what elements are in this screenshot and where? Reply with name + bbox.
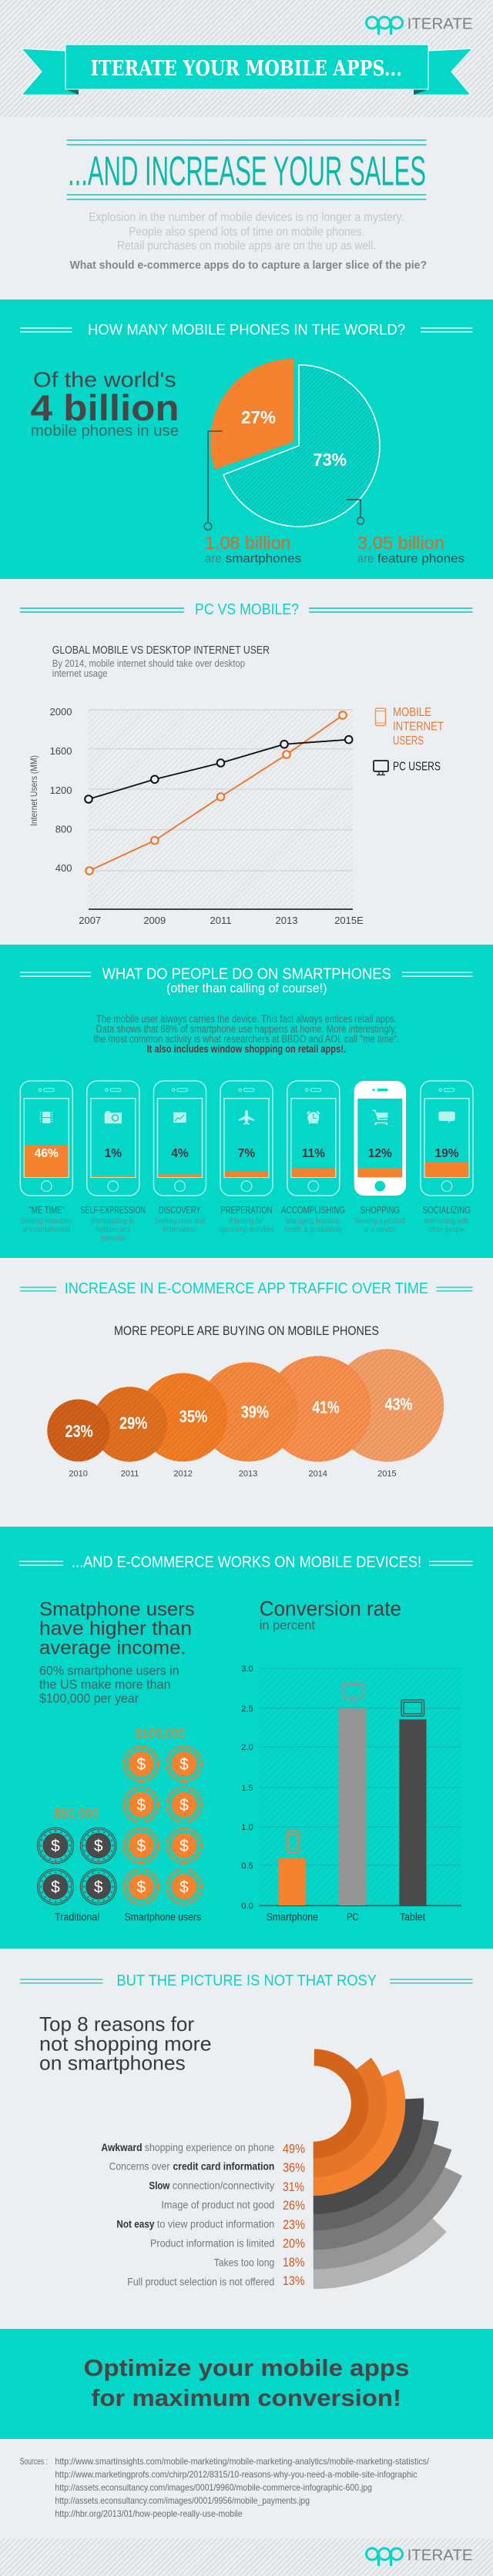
- intro text: Explosion in the number of mobile devices is no longer a mystery.: [89, 211, 404, 224]
- phone labels: SELF-EXPRESSION: [80, 1204, 146, 1216]
- text: top 8 reasons: on smartphones: [39, 2051, 186, 2074]
- icon: film: [40, 1112, 52, 1123]
- dollar signs: $: [136, 1878, 146, 1896]
- x axis labels: 2013: [276, 915, 297, 926]
- axis labels: 3.0: [241, 1664, 253, 1674]
- bar: pc: [339, 1708, 366, 1905]
- header hatched band: [0, 0, 493, 117]
- text: top 8 reasons: [39, 2012, 212, 2074]
- pictogram: income coins: $50,000: [54, 1806, 99, 1821]
- callout: feature phones: 3.05 billion: [357, 533, 444, 553]
- callout: smartphones: [205, 533, 301, 566]
- x axis labels: 2015E: [334, 915, 364, 926]
- radial chart: reasons: [276, 2048, 462, 2290]
- values: 23%: [65, 1422, 93, 1441]
- y axis labels: 1600: [50, 745, 72, 757]
- pie chart: [204, 359, 380, 530]
- axis labels: 2.0: [241, 1743, 253, 1752]
- percent values: 13%: [283, 2273, 305, 2288]
- years: 2011: [121, 1469, 139, 1478]
- icon: tablet: [401, 1700, 424, 1716]
- reason rows: Takes too long: [214, 2257, 274, 2269]
- subheading: buying on mobile: MORE PEOPLE ARE BUYING ON MOBILE PHONES: [114, 1323, 379, 1338]
- icon: speech bubble: [438, 1112, 455, 1123]
- text: 4 billion phones: [31, 368, 179, 440]
- phone: self-expression: [87, 1081, 139, 1196]
- icon: smartphone: [287, 1831, 299, 1852]
- reason rows: shopping experience on phone: [145, 2141, 274, 2153]
- phone: preperation: [220, 1081, 273, 1196]
- phone descriptions: Managing finances,: [286, 1216, 340, 1226]
- heading: pc vs mobile: PC VS MOBILE?: [195, 601, 299, 618]
- percent values: 26%: [283, 2198, 305, 2213]
- callout: feature phones: are: [357, 553, 374, 566]
- phone labels: SOCIALIZING: [423, 1204, 471, 1216]
- values: [65, 1395, 413, 1441]
- phone descriptions: health & productivity: [284, 1225, 343, 1234]
- pictogram: income coins: Smartphone users: [125, 1911, 201, 1923]
- dollar signs: $: [94, 1837, 103, 1855]
- sources: http://www.smartinsights.com/mobile-marketing/mobile-marketing-analytics/mobile-marketing-statistics/: [55, 2456, 430, 2467]
- panel: call to action: Optimize your mobile apps: [84, 2354, 409, 2381]
- phone: discovery: 4%: [171, 1147, 189, 1160]
- years: 2012: [173, 1469, 193, 1478]
- phone descriptions: Seeking a product: [354, 1216, 405, 1226]
- pictogram: income coins: $100,000: [136, 1726, 186, 1741]
- years: 2013: [239, 1469, 257, 1478]
- heading: e-commerce traffic: INCREASE IN E-COMMERCE APP TRAFFIC OVER TIME: [65, 1280, 428, 1297]
- legend: pc users: PC USERS: [393, 761, 441, 774]
- pie chart: 73%: [313, 450, 347, 470]
- phone: self-expression: 1%: [105, 1147, 122, 1160]
- dollar signs: $: [179, 1797, 189, 1814]
- heading: conversion rate: Conversion rate: [260, 1597, 401, 1620]
- callout: feature phones: [357, 533, 464, 566]
- panel: call to action: for maximum conversion!: [91, 2384, 401, 2411]
- y axis labels: [50, 706, 72, 874]
- icon: cart: [373, 1110, 388, 1125]
- sources: Sources :: [20, 2456, 48, 2467]
- logo: appiterate top: ITERATE: [407, 16, 473, 33]
- panel: e-commerce works on mobile: [0, 1527, 493, 1949]
- phone descriptions: or entertainment: [22, 1225, 70, 1234]
- dollar signs: $: [179, 1878, 189, 1896]
- text: 4 billion phones: 4 billion: [31, 387, 179, 428]
- legend: mobile internet users: MOBILE: [393, 706, 431, 719]
- intro text: [70, 211, 427, 272]
- dollar signs: $: [136, 1797, 146, 1814]
- reason rows: connection/connectivity: [173, 2180, 274, 2192]
- callout: feature phones: feature phones: [377, 553, 464, 566]
- text: income claim: 60% smartphone users in: [39, 1663, 179, 1678]
- years: 2015: [377, 1469, 397, 1478]
- percent values: 23%: [283, 2217, 305, 2232]
- phone descriptions: hobbies and: [96, 1225, 130, 1234]
- chart heading: By 2014, mobile internet should take over desktop: [52, 657, 245, 669]
- callout: smartphones: 1.08 billion: [205, 533, 291, 553]
- percent values: 36%: [283, 2160, 305, 2175]
- bar labels: Smartphone: [267, 1911, 318, 1923]
- pictogram: income coins: Traditional: [55, 1911, 99, 1923]
- years: [69, 1469, 397, 1478]
- reason rows: Awkward: [101, 2141, 142, 2153]
- x axis labels: 2011: [210, 915, 231, 926]
- icon: chart: [173, 1112, 186, 1122]
- years: 2014: [308, 1469, 327, 1478]
- x axis labels: [79, 915, 364, 926]
- sources: [20, 2456, 430, 2519]
- heading: conversion rate: [260, 1597, 401, 1633]
- logo: appiterate bottom: [367, 2548, 473, 2566]
- intro text: What should e-commerce apps do to capture a larger slice of the pie?: [70, 259, 427, 272]
- text: income claim: the US make more than: [39, 1677, 171, 1691]
- phone descriptions: Participating in: [92, 1216, 134, 1226]
- values: 29%: [119, 1413, 147, 1433]
- footer hatched band: [0, 2538, 493, 2576]
- y axis labels: 800: [55, 824, 72, 835]
- axis labels: 0.0: [241, 1902, 253, 1911]
- axis labels: [241, 1664, 253, 1911]
- percent values: 18%: [283, 2255, 305, 2270]
- heading: what do people do: (other than calling of course!): [166, 981, 327, 995]
- x axis labels: 2007: [79, 915, 101, 926]
- bubble chart: [47, 1349, 444, 1478]
- heading: not that rosy: BUT THE PICTURE IS NOT THAT ROSY: [116, 1972, 377, 1989]
- bar: tablet: [399, 1719, 427, 1905]
- reason rows: Slow: [149, 2180, 169, 2192]
- intro text: Retail purchases on mobile apps are on the up as well.: [117, 239, 376, 253]
- logo: appiterate top: [367, 16, 473, 35]
- phone descriptions: or a service: [364, 1225, 396, 1234]
- callout: smartphones: smartphones: [226, 553, 301, 566]
- phone descriptions: information: [163, 1225, 196, 1234]
- phone labels: DISCOVERY: [159, 1204, 201, 1216]
- percent values: 20%: [283, 2236, 305, 2251]
- dollar signs: $: [179, 1837, 189, 1855]
- callout: smartphones: are: [205, 553, 222, 566]
- x axis labels: 2009: [143, 915, 166, 926]
- title ribbon: [22, 45, 472, 95]
- values: 43%: [385, 1395, 413, 1414]
- years: 2010: [69, 1469, 88, 1478]
- chart heading: GLOBAL MOBILE VS DESKTOP INTERNET USER: [52, 644, 270, 657]
- values: 41%: [312, 1398, 340, 1417]
- reason rows: [101, 2141, 305, 2288]
- percent values: [283, 2142, 305, 2288]
- phone descriptions: Planning for: [230, 1216, 263, 1226]
- icon: plane: [239, 1110, 254, 1125]
- icon: monitor: [342, 1683, 364, 1703]
- dark coins: [38, 1828, 116, 1905]
- icon: alarm clock: [307, 1112, 320, 1124]
- phone: me time: [20, 1081, 72, 1196]
- text: explanation: The mobile user always carries the device. This fact always entices retail apps.: [96, 1013, 397, 1025]
- dollar signs: $: [179, 1755, 189, 1774]
- phone: socializing: 19%: [434, 1147, 459, 1160]
- dollar signs: $: [51, 1878, 60, 1896]
- y axis labels: 400: [55, 862, 72, 874]
- legend: mobile internet users: INTERNET: [393, 721, 444, 734]
- series: pc: [85, 736, 353, 803]
- phone descriptions: upcoming activities: [219, 1225, 274, 1234]
- sources: http://assets.econsultancy.com/images/0001/9960/mobile-commerce-infographic-600.jpg: [55, 2482, 372, 2493]
- reason rows: Image of product not good: [161, 2199, 274, 2211]
- panel: what people do on smartphones: [0, 945, 493, 1258]
- pictogram: income coins: [38, 1726, 202, 1923]
- series: mobile: [86, 711, 347, 875]
- pie chart: 27%: [241, 407, 276, 427]
- values: 39%: [241, 1403, 269, 1422]
- text: explanation: Data shows that 68% of smartphone use happens at home. More interestingly,: [96, 1023, 397, 1035]
- reason rows: credit card information: [173, 2160, 274, 2173]
- text: explanation: It also includes window shopping on retail apps!.: [147, 1043, 346, 1055]
- y axis labels: 2000: [50, 706, 72, 718]
- phone: discovery: [154, 1081, 206, 1196]
- phone labels: PREPERATION: [220, 1204, 273, 1216]
- title ribbon: ITERATE YOUR MOBILE APPS...: [91, 57, 402, 81]
- reason rows: Not easy: [116, 2218, 155, 2230]
- y axis labels: 1200: [50, 785, 72, 796]
- heading: how many phones: HOW MANY MOBILE PHONES IN THE WORLD?: [88, 323, 405, 339]
- text: income claim: have higher than: [39, 1618, 192, 1640]
- phone: socializing: [421, 1081, 473, 1196]
- text: income claim: $100,000 per year: [39, 1691, 139, 1705]
- dollar signs: [51, 1755, 189, 1896]
- reason rows: Product information is limited: [150, 2237, 274, 2250]
- axis labels: 1.5: [241, 1784, 253, 1793]
- phone descriptions: Seeking news and: [154, 1216, 205, 1226]
- heading: what do people do: [20, 966, 473, 995]
- heading: conversion rate: in percent: [260, 1618, 315, 1633]
- phone labels: SHOPPING: [361, 1204, 400, 1216]
- text: top 8 reasons: Top 8 reasons for: [39, 2012, 194, 2036]
- text: income claim: average income.: [39, 1638, 186, 1659]
- reason rows: to view product information: [157, 2218, 274, 2230]
- dollar signs: $: [136, 1755, 146, 1774]
- text: explanation: [94, 1013, 399, 1055]
- logo: appiterate bottom: ITERATE: [407, 2548, 473, 2564]
- phone: accomplishing: [287, 1081, 340, 1196]
- bar labels: PC: [347, 1911, 358, 1923]
- heading: what do people do: WHAT DO PEOPLE DO ON SMARTPHONES: [102, 966, 391, 983]
- panel: call to action: [0, 2329, 493, 2439]
- values: 35%: [179, 1407, 207, 1426]
- axis labels: 2.5: [241, 1705, 253, 1714]
- bar: smartphone: [279, 1858, 306, 1905]
- reason rows: Full product selection is not offered: [127, 2275, 274, 2287]
- orange coins: [123, 1746, 202, 1905]
- phone descriptions: Seeking relaxation: [20, 1216, 72, 1226]
- text: explanation: the most common activity is what researchers at BBDO and AOL call "me time".: [94, 1033, 399, 1045]
- phone: preperation: 7%: [238, 1147, 255, 1160]
- line chart: [29, 706, 364, 926]
- phone: shopping (highlighted): [354, 1081, 406, 1196]
- chart heading: [52, 644, 270, 679]
- axis labels: 0.5: [241, 1862, 253, 1871]
- phone: me time: 46%: [35, 1147, 59, 1160]
- phone labels: "ME TIME": [29, 1204, 65, 1216]
- text: 4 billion phones: mobile phones in use: [31, 423, 179, 440]
- sources: http://hbr.org/2013/01/how-people-really-use-mobile: [55, 2508, 243, 2519]
- bar labels: [267, 1911, 425, 1923]
- bar chart: conversion rate: [241, 1664, 461, 1923]
- legend: pc users: [374, 761, 441, 774]
- chart heading: internet usage: [52, 667, 108, 679]
- y axis title: Internet Users (MM): [29, 755, 39, 826]
- phone labels: [29, 1204, 471, 1216]
- phone descriptions: [20, 1216, 469, 1243]
- text: 4 billion phones: Of the world's: [33, 368, 176, 392]
- dollar signs: $: [51, 1837, 60, 1855]
- phone labels: ACCOMPLISHING: [281, 1204, 345, 1216]
- sources: http://www.marketingprofs.com/chirp/2012/8315/10-reasons-why-you-need-a-mobile-site-infographic: [55, 2469, 418, 2480]
- sources: http://assets.econsultancy.com/images/0001/9956/mobile_payments.jpg: [55, 2495, 310, 2506]
- dollar signs: $: [136, 1837, 146, 1855]
- text: top 8 reasons: not shopping more: [39, 2032, 212, 2055]
- phone descriptions: other people: [428, 1225, 464, 1234]
- bar labels: Tablet: [400, 1911, 425, 1923]
- reason rows: Concerns over: [109, 2160, 170, 2173]
- axis labels: 1.0: [241, 1823, 253, 1832]
- text: income claim: Smatphone users: [39, 1598, 195, 1620]
- intro text: People also spend lots of time on mobile phones.: [129, 226, 365, 239]
- heading: works on mobile: ...AND E-COMMERCE WORKS ON MOBILE DEVICES!: [72, 1554, 421, 1571]
- panel: how many mobile phones: [0, 299, 493, 579]
- percent values: 49%: [283, 2142, 305, 2156]
- legend: mobile internet users: USERS: [393, 734, 424, 748]
- phone descriptions: Interacting with: [424, 1216, 469, 1226]
- percent values: 31%: [283, 2180, 304, 2194]
- phone: accomplishing: 11%: [302, 1147, 325, 1160]
- phone descriptions: interests: [101, 1233, 125, 1243]
- icon: camera: [105, 1111, 122, 1123]
- phone: shopping (highlighted): 12%: [368, 1147, 392, 1160]
- legend: mobile internet users: [376, 706, 444, 748]
- dollar signs: $: [94, 1878, 103, 1896]
- text: income claim: [39, 1598, 195, 1705]
